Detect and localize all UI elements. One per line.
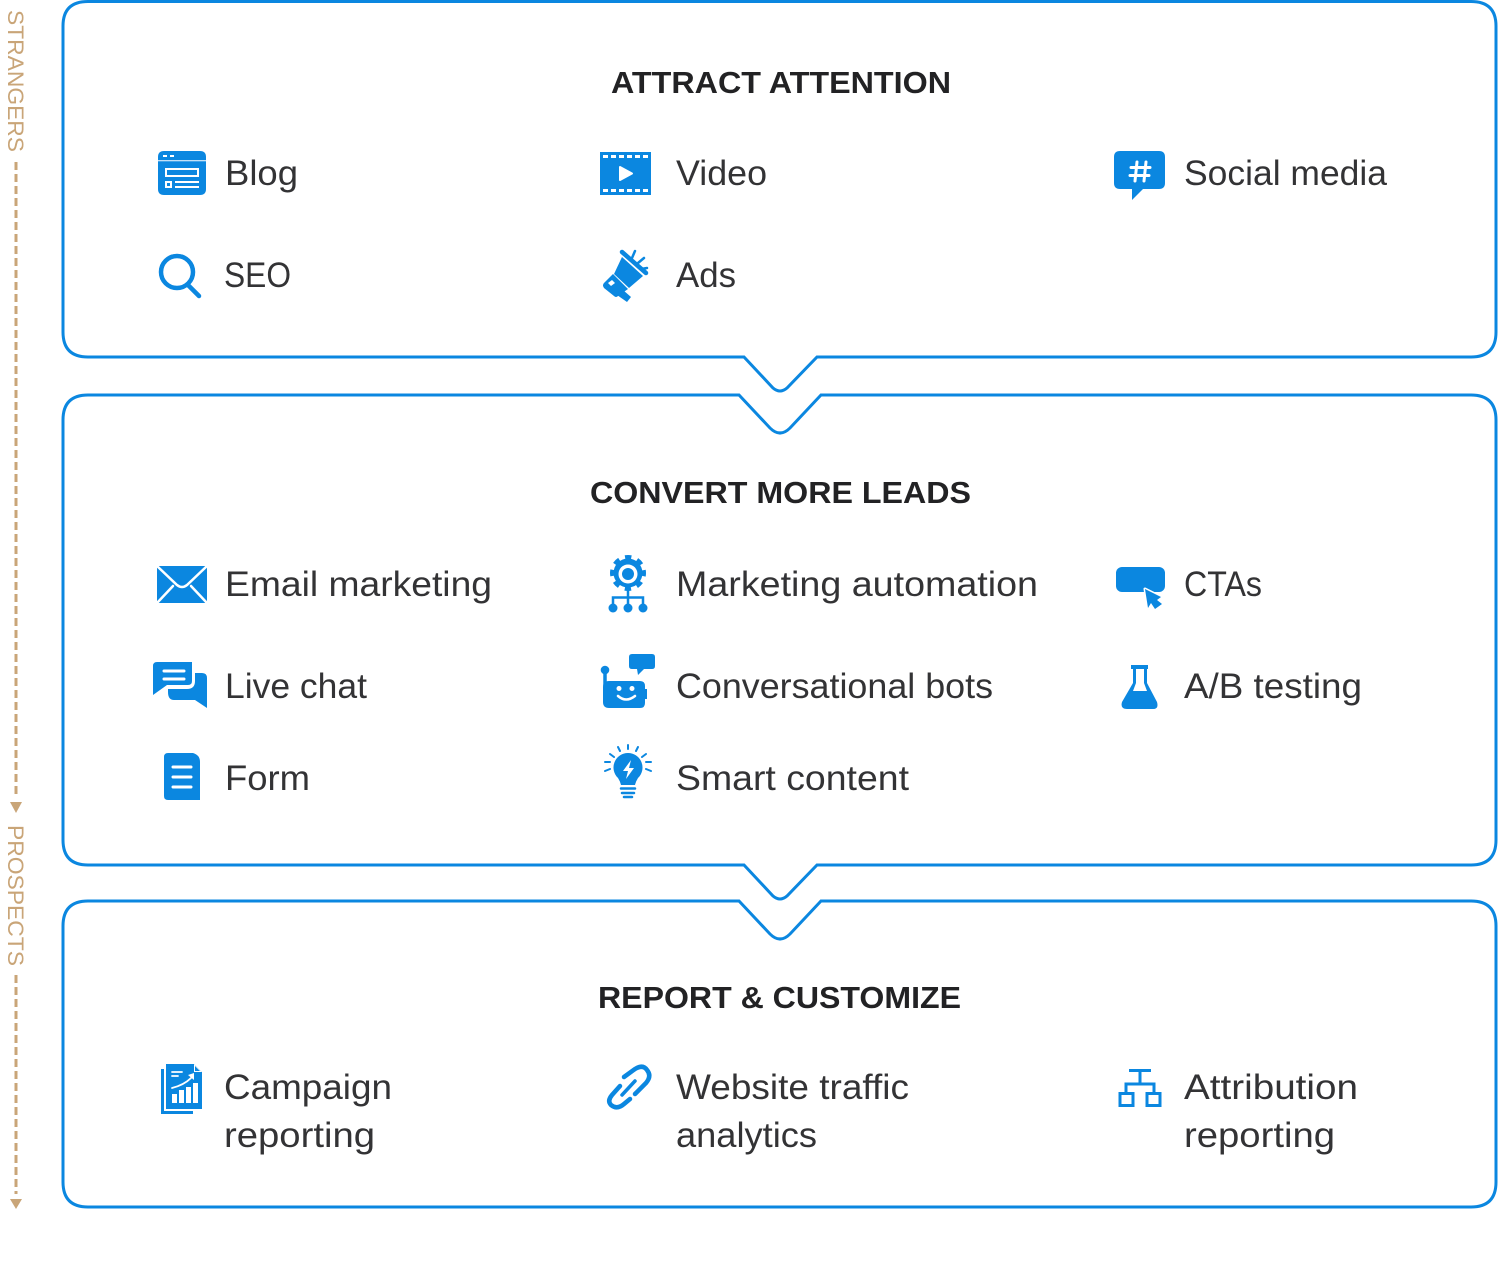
panel: attract attention: [63, 2, 1496, 391]
item: ctas: [1116, 565, 1262, 609]
label: prospects: PROSPECTS: [3, 825, 28, 966]
item: video: [600, 152, 767, 195]
item: video: Video: [676, 154, 767, 193]
item: smart content: Smart content: [676, 759, 909, 798]
item: seo: SEO: [224, 256, 291, 295]
item: website traffic analytics: Website traffic: [676, 1068, 909, 1107]
item: attribution reporting: reporting: [1184, 1116, 1335, 1155]
item: ads: [603, 251, 736, 302]
item: attribution reporting: [1120, 1068, 1358, 1155]
item: a/b testing: A/B testing: [1184, 667, 1362, 706]
heading: CONVERT MORE LEADS: [590, 475, 971, 510]
item: email marketing: Email marketing: [225, 565, 492, 604]
panel: convert more leads: [63, 395, 1496, 899]
item: ads: Ads: [676, 256, 736, 295]
item: website traffic analytics: [609, 1067, 909, 1155]
item: live chat: Live chat: [225, 667, 367, 706]
item: conversational bots: Conversational bots: [676, 667, 993, 706]
item: social media: Social media: [1184, 154, 1388, 193]
item: smart content: [605, 745, 909, 798]
item: blog: Blog: [225, 154, 298, 193]
label: strangers: STRANGERS: [3, 10, 28, 152]
item: marketing automation: Marketing automation: [676, 565, 1038, 604]
panel outline: [63, 901, 1496, 1207]
item: a/b testing: [1122, 665, 1362, 709]
item: campaign reporting: [161, 1064, 392, 1155]
item: attribution reporting: Attribution: [1184, 1068, 1358, 1107]
item: ctas: CTAs: [1184, 565, 1262, 604]
item: conversational bots: [601, 654, 993, 708]
arrow: to prospects: [10, 802, 22, 813]
arrow: axis end: [10, 1199, 22, 1209]
heading: REPORT & CUSTOMIZE: [598, 980, 961, 1015]
item: social media: [1114, 151, 1388, 200]
side axis: strangers to prospects: [3, 10, 28, 1209]
item: seo: [161, 256, 291, 296]
item: campaign reporting: Campaign: [224, 1068, 392, 1107]
item: form: [164, 753, 310, 800]
panel: report and customize: [63, 901, 1496, 1207]
item: campaign reporting: reporting: [224, 1116, 375, 1155]
item: form: Form: [225, 759, 310, 798]
item: marketing automation: [608, 557, 1038, 612]
item: website traffic analytics: analytics: [676, 1116, 817, 1155]
panel outline: [63, 395, 1496, 899]
panel outline: [63, 2, 1496, 391]
heading: ATTRACT ATTENTION: [611, 65, 951, 100]
item: live chat: [153, 662, 367, 708]
item: blog: [158, 151, 298, 195]
